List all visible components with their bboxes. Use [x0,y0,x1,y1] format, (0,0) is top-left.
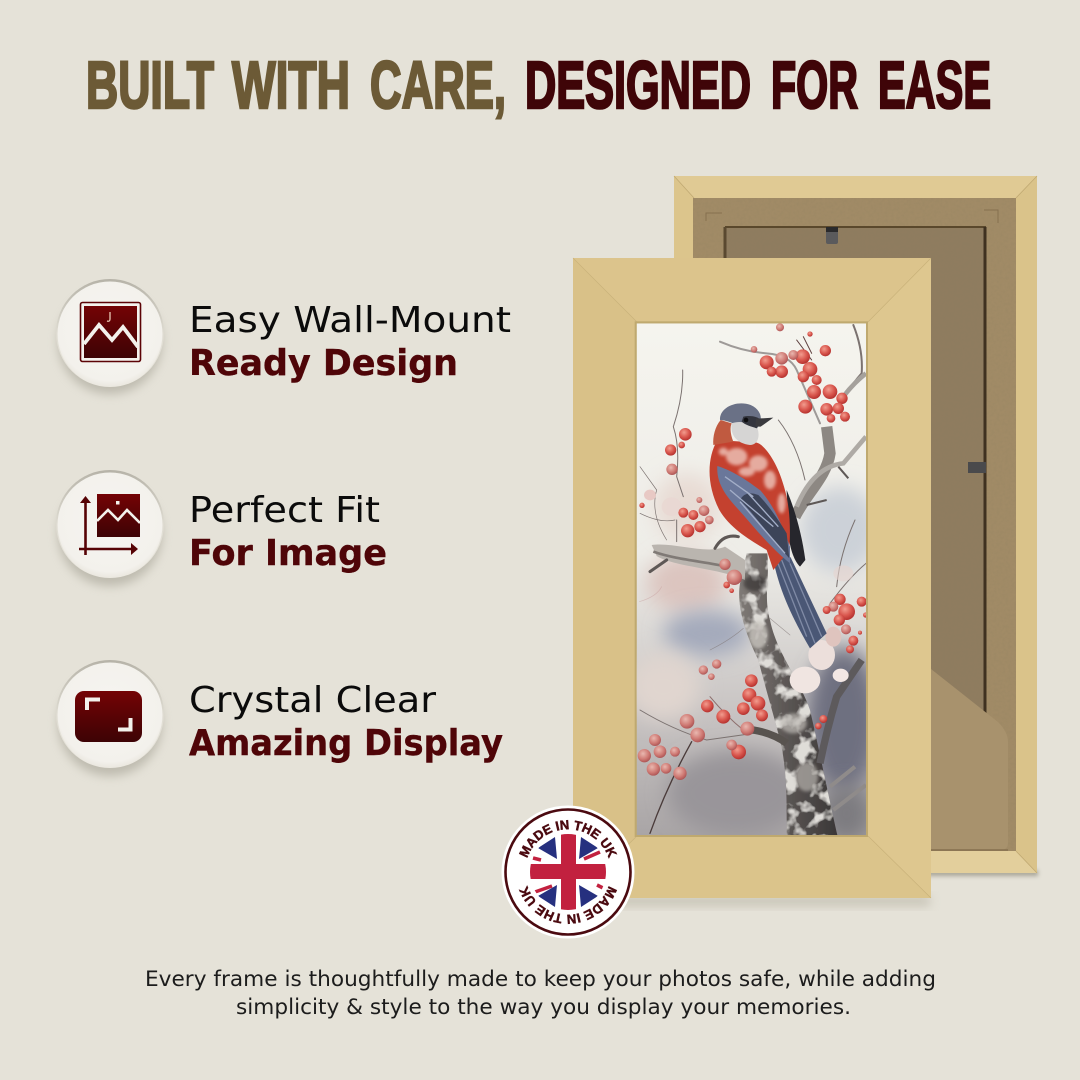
text: crystal clear [189,680,503,764]
text: perfect fit: Perfect Fit [189,490,380,531]
feature: crystal clear [56,660,503,776]
title: CARE, [370,48,506,123]
front frame [573,258,931,898]
easel stand [931,669,1008,850]
artwork: bird on a berry branch [627,321,880,843]
title: EASE [878,48,991,123]
text: perfect fit: For Image [189,533,387,574]
text: crystal clear: Amazing Display [189,723,503,764]
footer text [145,967,936,1020]
title: DESIGNED [525,48,751,123]
badge: made in the UK [502,806,634,938]
footer text: simplicity & style to the way you display your memories. [236,995,851,1020]
blossoms [644,490,853,693]
front frame shadow [590,896,930,906]
title: WITH [232,48,350,123]
bird [710,403,827,648]
branches and trunk [650,373,866,835]
text: easy wall-mount [189,300,511,384]
icon: rounded display with corner marks [56,660,164,776]
feature: easy wall-mount [56,279,511,394]
hanger slots [826,227,986,473]
badge text: MADE IN THE UK [518,885,618,924]
text: crystal clear: Crystal Clear [189,680,436,721]
painting background [636,323,866,835]
back of frame [674,176,1038,876]
text: easy wall-mount: Easy Wall-Mount [189,300,511,341]
thin twigs [639,325,866,833]
berries [638,323,868,780]
backing board [693,198,1016,851]
feature: perfect fit [56,470,387,586]
title: FOR [771,48,858,123]
union jack [530,834,606,910]
badge text [518,820,618,924]
title [86,48,991,123]
badge text: MADE IN THE UK [518,820,618,859]
title: BUILT [86,48,214,123]
icon: framed mountain with hook [56,279,164,394]
footer text: Every frame is thoughtfully made to keep your photos safe, while adding [145,967,936,992]
text: perfect fit [189,490,387,574]
text: easy wall-mount: Ready Design [189,343,458,384]
recess [725,226,986,726]
icon: image with dimension arrows [56,470,164,586]
